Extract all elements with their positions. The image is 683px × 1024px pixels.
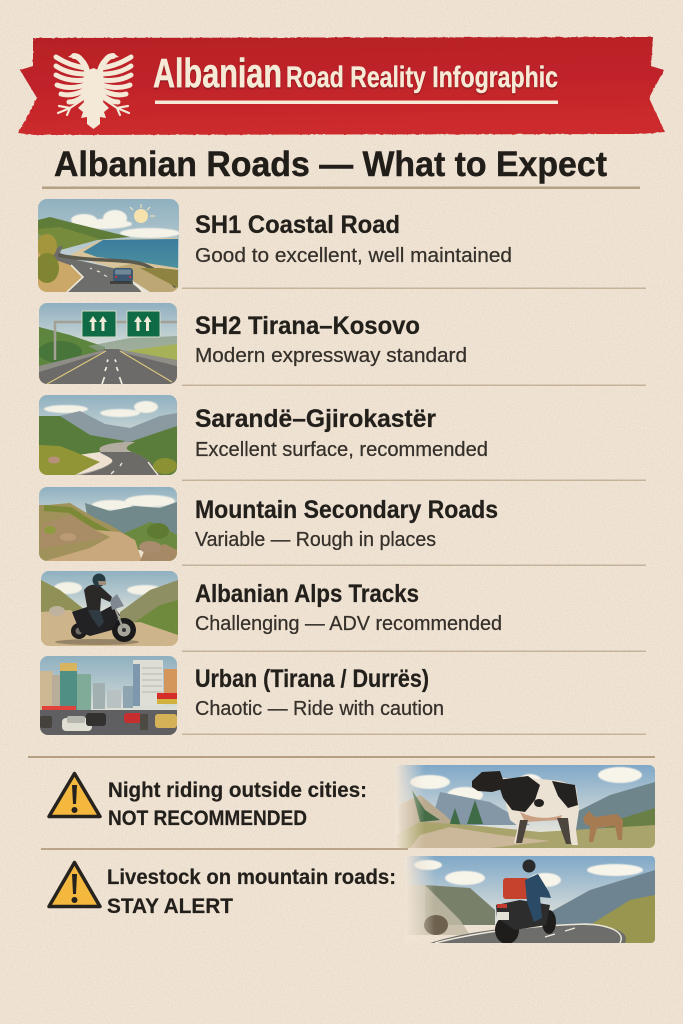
icon: warning triangle: [49, 774, 100, 816]
row description: Excellent surface, recommended: [195, 439, 488, 461]
row: Sarandë–Gjirokastër: [39, 395, 488, 475]
row: Urban (Tirana / Durrës): [40, 656, 444, 735]
main heading: Albanian Roads — What to Expect: [54, 145, 607, 184]
illustration: cow and calf in the mountains: [395, 765, 655, 848]
warning: night riding: [49, 765, 655, 848]
banner title: Albanian: [153, 50, 282, 96]
warning status: NOT RECOMMENDED: [108, 807, 307, 830]
illustration: expressway with gantry signs: [38, 303, 177, 384]
illustration: coastal road with car: [35, 199, 180, 292]
warning: livestock: [49, 856, 655, 944]
row title: SH2 Tirana–Kosovo: [195, 312, 420, 340]
banner title: [153, 50, 558, 96]
icon: Albanian double-headed eagle: [56, 53, 131, 129]
row: Mountain Secondary Roads: [39, 487, 498, 561]
icon: warning triangle: [49, 862, 100, 906]
row: SH2 Tirana–Kosovo: [38, 303, 467, 384]
row description: Good to excellent, well maintained: [195, 245, 512, 267]
row description: Variable — Rough in places: [195, 529, 436, 551]
warning status: STAY ALERT: [107, 895, 233, 918]
illustration: busy city street: [40, 656, 177, 735]
row title: Albanian Alps Tracks: [195, 580, 419, 608]
title banner: [18, 37, 665, 135]
row description: Challenging — ADV recommended: [195, 613, 502, 635]
row title: Mountain Secondary Roads: [195, 496, 498, 524]
row: Albanian Alps Tracks: [41, 571, 502, 646]
banner title: Road Reality Infographic: [286, 61, 558, 94]
row title: Sarandë–Gjirokastër: [195, 405, 436, 433]
warning text: Livestock on mountain roads:: [107, 866, 396, 889]
row title: Urban (Tirana / Durrës): [195, 665, 429, 693]
illustration: adventure motorcycle on track: [41, 571, 178, 646]
illustration: winding valley road: [39, 395, 177, 475]
row: SH1 Coastal Road: [35, 199, 512, 292]
row title: SH1 Coastal Road: [195, 211, 400, 239]
row description: Modern expressway standard: [195, 345, 467, 367]
illustration: rider with red fuel can: [405, 856, 655, 944]
warning text: Night riding outside cities:: [108, 779, 367, 802]
row description: Chaotic — Ride with caution: [195, 698, 444, 720]
banner underline: [155, 100, 558, 104]
banner ribbon: [18, 37, 665, 135]
illustration: rough mountain track: [39, 487, 177, 561]
